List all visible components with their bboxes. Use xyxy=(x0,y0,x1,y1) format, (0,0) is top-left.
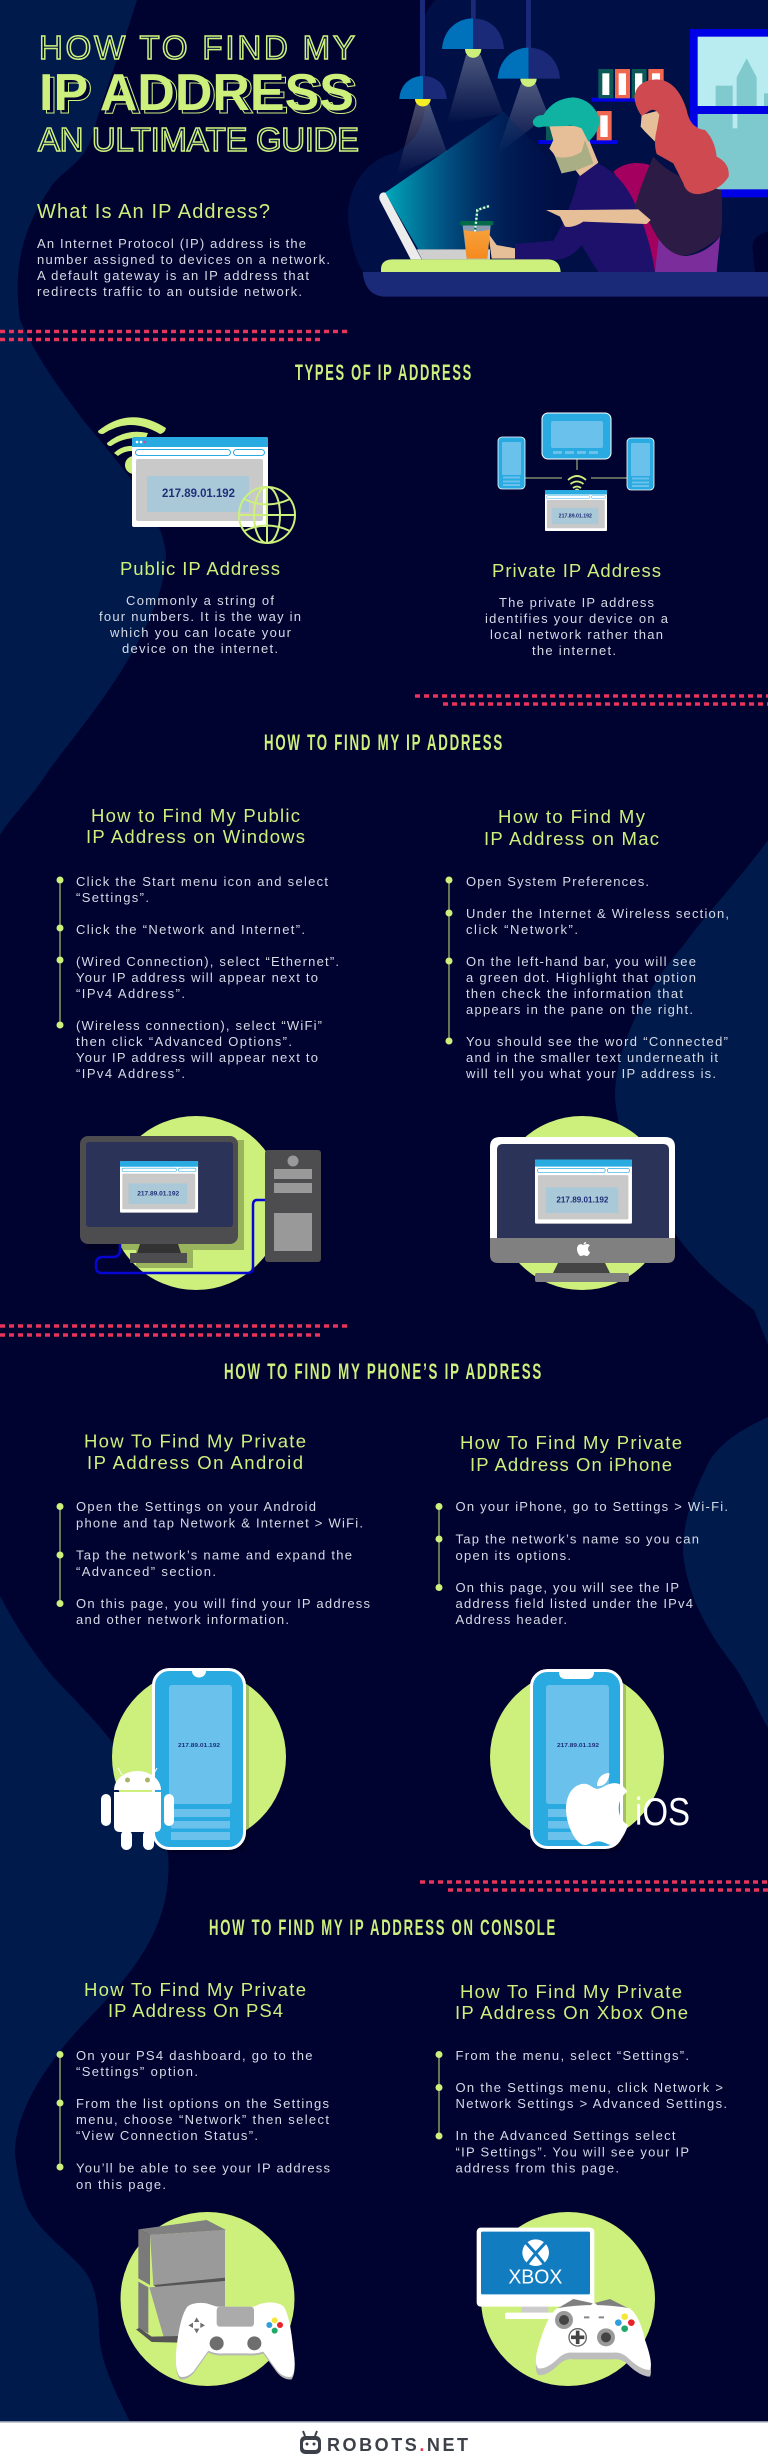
heading xyxy=(484,806,659,849)
steps: Open the Settings on your Android xyxy=(76,1499,316,1514)
desk xyxy=(363,272,768,297)
logo icon: robot xyxy=(300,2431,321,2454)
laptop xyxy=(379,192,490,259)
private IP title and text: The private IP address xyxy=(499,595,654,610)
browser window: 217.89.01.192 xyxy=(137,1190,179,1197)
game controller xyxy=(176,2302,295,2379)
browser window xyxy=(132,437,268,527)
heading xyxy=(455,1981,688,2023)
what is an IP address: number assigned to devices on a network. xyxy=(37,252,330,267)
heading: How to Find My xyxy=(498,806,646,827)
icon: xbox logo xyxy=(522,2239,549,2267)
panel: xbox steps xyxy=(436,1981,727,2176)
what is an IP address xyxy=(37,201,330,299)
section heading: phone: HOW TO FIND MY PHONE’S IP ADDRESS xyxy=(224,1359,543,1384)
steps: menu, choose “Network” then select xyxy=(76,2112,329,2127)
lime circle xyxy=(481,2212,655,2386)
heading: How To Find My Private xyxy=(84,1979,306,2000)
timeline xyxy=(436,2051,442,2140)
steps xyxy=(76,2048,330,2192)
steps: then check the information that xyxy=(466,986,683,1001)
phone: 217.89.01.192 xyxy=(178,1743,220,1749)
logo wordmark: ROBOTS.NET xyxy=(327,2435,468,2455)
illustration: Xbox xyxy=(477,2212,655,2386)
what is an IP address: What Is An IP Address? xyxy=(37,201,270,223)
panel: iphone steps xyxy=(436,1432,728,1627)
steps: “IP Settings”. You will see your IP xyxy=(456,2144,689,2160)
timeline xyxy=(56,2051,64,2170)
phone: 217.89.01.192 xyxy=(557,1743,599,1749)
browser window xyxy=(545,490,607,531)
browser window xyxy=(535,1160,632,1224)
heading xyxy=(84,1979,306,2021)
lime circle xyxy=(120,2212,294,2386)
console xyxy=(136,2220,226,2343)
public IP title and text xyxy=(99,558,301,656)
steps: From the list options on the Settings xyxy=(76,2096,330,2111)
monitor xyxy=(490,1137,675,1282)
steps: appears in the pane on the right. xyxy=(466,1002,693,1017)
woman with red hair xyxy=(546,79,729,272)
lime desk mat xyxy=(381,259,561,272)
steps: phone and tap Network & Internet > WiFi. xyxy=(76,1516,363,1530)
hanging lamps xyxy=(399,0,560,106)
steps: “IPv4 Address”. xyxy=(76,986,185,1001)
lime circle xyxy=(109,1116,283,1290)
timeline xyxy=(446,876,452,1044)
steps: On this page, you will find your IP address xyxy=(76,1596,370,1611)
steps: You’ll be able to see your IP address xyxy=(76,2160,330,2176)
monitor xyxy=(80,1136,238,1263)
heading xyxy=(84,1430,306,1473)
title line 1: HOW TO FIND MY xyxy=(39,29,358,66)
title xyxy=(38,29,359,158)
phone xyxy=(154,1668,249,1853)
steps: Under the Internet & Wireless section, xyxy=(466,906,729,921)
steps: From the menu, select “Settings”. xyxy=(456,2048,689,2063)
heading: IP Address on Mac xyxy=(484,828,659,849)
heading: IP Address On Android xyxy=(87,1452,303,1473)
public IP title and text: four numbers. It is the way in xyxy=(99,609,301,624)
lime circle xyxy=(495,1116,669,1290)
steps: Address header. xyxy=(456,1612,567,1627)
panel: mac steps xyxy=(446,806,729,1081)
private IP title and text: the internet. xyxy=(532,643,616,658)
icon: private IP network xyxy=(498,413,654,531)
steps xyxy=(465,874,729,1081)
monitor: XBOX xyxy=(508,2265,563,2288)
game controller xyxy=(536,2299,651,2377)
steps: will tell you what your IP address is. xyxy=(465,1066,716,1081)
heading xyxy=(460,1432,682,1475)
heading: IP Address On Xbox One xyxy=(455,2002,688,2023)
steps: “Settings” option. xyxy=(76,2064,198,2079)
icon: apple xyxy=(577,1242,590,1256)
steps xyxy=(76,874,339,1081)
heading: How To Find My Private xyxy=(84,1430,306,1452)
laptop screen glow xyxy=(385,112,570,249)
man with teal hair xyxy=(488,97,655,272)
steps: Click the Start menu icon and select xyxy=(76,874,328,889)
phone xyxy=(532,1669,626,1852)
illustration: iMac xyxy=(490,1116,675,1290)
steps: Tap the network’s name so you can xyxy=(456,1532,699,1546)
public IP title and text: Public IP Address xyxy=(120,558,280,579)
icon: globe xyxy=(239,487,295,543)
timeline xyxy=(56,876,64,1028)
heading: IP Address On iPhone xyxy=(470,1454,672,1475)
browser window: 217.89.01.192 xyxy=(559,513,592,519)
timeline xyxy=(56,1503,64,1607)
what is an IP address: redirects traffic to an outside network. xyxy=(37,284,302,299)
panel: ps4 steps xyxy=(56,1979,330,2192)
steps: You should see the word “Connected” xyxy=(466,1034,728,1049)
public IP title and text: Commonly a string of xyxy=(126,593,274,608)
title line 2: IP ADDRESS xyxy=(39,64,354,122)
timeline xyxy=(436,1503,442,1591)
steps: On your iPhone, go to Settings > Wi-Fi. xyxy=(456,1499,728,1514)
heading: How To Find My Private xyxy=(460,1432,682,1453)
right phone xyxy=(627,438,654,490)
private IP title and text: identifies your device on a xyxy=(485,611,669,626)
monitor xyxy=(477,2228,594,2319)
monitor shadow xyxy=(86,1140,244,1268)
steps: Your IP address will appear next to xyxy=(76,1050,318,1065)
steps: click “Network”. xyxy=(466,922,578,937)
title line 3: AN ULTIMATE GUIDE xyxy=(38,121,359,158)
heading: How To Find My Private xyxy=(460,1981,682,2002)
steps: address from this page. xyxy=(456,2160,619,2176)
tablet xyxy=(542,413,611,459)
steps xyxy=(456,2048,727,2176)
section heading: types: TYPES OF IP ADDRESS xyxy=(295,360,473,385)
heading: IP Address on Windows xyxy=(86,826,305,847)
public IP title and text: device on the internet. xyxy=(122,641,278,656)
illustration: iphone xyxy=(490,1669,690,1852)
steps: open its options. xyxy=(456,1548,571,1563)
private IP title and text: local network rather than xyxy=(490,627,663,642)
icon: wifi xyxy=(568,476,586,492)
city window xyxy=(690,29,768,197)
steps: Your IP address will appear next to xyxy=(76,970,318,985)
steps xyxy=(456,1499,728,1627)
browser window xyxy=(120,1161,198,1213)
what is an IP address: A default gateway is an IP address that xyxy=(37,268,309,283)
icon: wifi xyxy=(98,417,166,474)
steps: (Wired Connection), select “Ethernet”. xyxy=(76,954,339,969)
steps: a green dot. Highlight that option xyxy=(466,970,696,985)
browser window: 217.89.01.192 xyxy=(162,488,235,500)
chair xyxy=(613,163,660,272)
steps: and in the smaller text underneath it xyxy=(466,1050,718,1065)
steps: Open System Preferences. xyxy=(466,874,649,889)
iOS label: iOS xyxy=(635,1791,690,1834)
steps: “View Connection Status”. xyxy=(76,2128,258,2143)
illustration backdrop xyxy=(348,0,768,272)
bookshelves xyxy=(538,69,664,144)
steps xyxy=(76,1499,370,1627)
section heading: find IP: HOW TO FIND MY IP ADDRESS xyxy=(264,730,504,755)
private IP title and text: Private IP Address xyxy=(492,560,661,581)
steps: “Settings”. xyxy=(76,890,149,905)
steps: On this page, you will see the IP xyxy=(456,1580,679,1595)
steps: Click the “Network and Internet”. xyxy=(76,922,305,937)
icon: public IP browser xyxy=(98,417,295,543)
steps: On your PS4 dashboard, go to the xyxy=(76,2048,312,2063)
PC tower xyxy=(265,1150,321,1262)
light cones xyxy=(397,55,548,175)
hero illustration xyxy=(348,0,768,297)
heading: How to Find My Public xyxy=(91,805,300,826)
panel: android steps xyxy=(56,1430,370,1627)
steps: Network Settings > Advanced Settings. xyxy=(456,2096,727,2111)
steps: Tap the network’s name and expand the xyxy=(76,1548,352,1562)
lime circle xyxy=(490,1670,664,1844)
steps: and other network information. xyxy=(76,1612,289,1627)
cable xyxy=(96,1200,265,1273)
what is an IP address: An Internet Protocol (IP) address is the xyxy=(37,236,306,251)
steps: In the Advanced Settings select xyxy=(456,2128,676,2143)
title line 2 shadow: IP ADDRESS xyxy=(43,67,358,125)
steps: on this page. xyxy=(76,2177,166,2192)
steps: On the Settings menu, click Network > xyxy=(456,2080,723,2095)
left phone xyxy=(498,437,525,489)
steps: “Advanced” section. xyxy=(76,1564,216,1579)
private IP title and text xyxy=(485,560,669,658)
far right silhouette xyxy=(752,232,768,272)
icon: apple xyxy=(566,1773,628,1845)
steps: (Wireless connection), select “WiFi” xyxy=(76,1018,322,1033)
lime circle xyxy=(112,1670,286,1844)
footer xyxy=(0,2421,768,2464)
steps: “IPv4 Address”. xyxy=(76,1066,185,1081)
steps: address field listed under the IPv4 xyxy=(456,1596,693,1611)
connector lines xyxy=(525,459,627,478)
icon: android robot xyxy=(101,1768,174,1850)
heading xyxy=(86,805,305,847)
illustration: windows desktop PC xyxy=(80,1116,321,1290)
steps: then click “Advanced Options”. xyxy=(76,1034,292,1049)
panel: windows steps xyxy=(56,805,339,1081)
drink cup xyxy=(460,206,493,259)
heading: IP Address On PS4 xyxy=(108,2000,283,2021)
public IP title and text: which you can locate your xyxy=(109,625,292,640)
illustration: PS4 xyxy=(120,2212,295,2386)
browser window: 217.89.01.192 xyxy=(556,1195,609,1204)
steps: On the left-hand bar, you will see xyxy=(466,954,696,969)
illustration: android phone xyxy=(101,1668,286,1853)
